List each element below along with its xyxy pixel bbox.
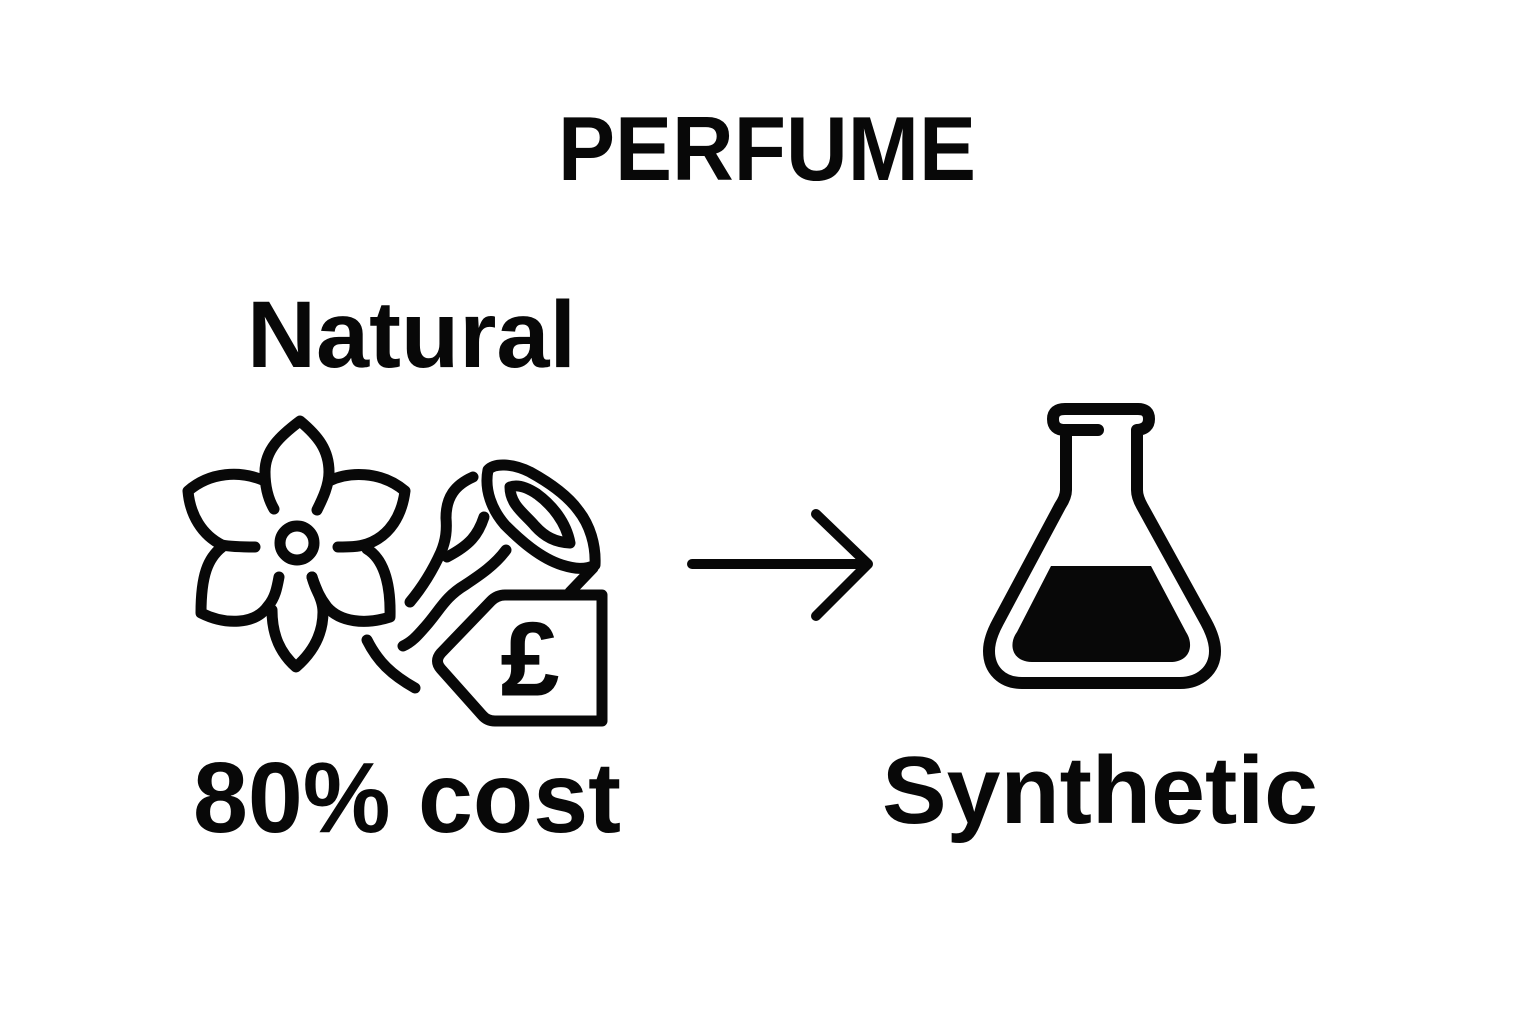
flask liquid: [1012, 566, 1190, 662]
icon: wood log with branch: [367, 465, 595, 688]
heading: natural: Natural: [247, 282, 576, 388]
icon: price tag with pound sign: [438, 595, 602, 721]
icon: flower: [188, 421, 405, 667]
arrow: [692, 514, 868, 616]
flower centre: [280, 526, 314, 560]
title: PERFUME: [558, 99, 976, 200]
icon: flask: [989, 409, 1215, 683]
label: synthetic: Synthetic: [882, 737, 1318, 844]
pound sign: £: [501, 602, 559, 718]
label: 80% cost: 80% cost: [193, 742, 621, 854]
